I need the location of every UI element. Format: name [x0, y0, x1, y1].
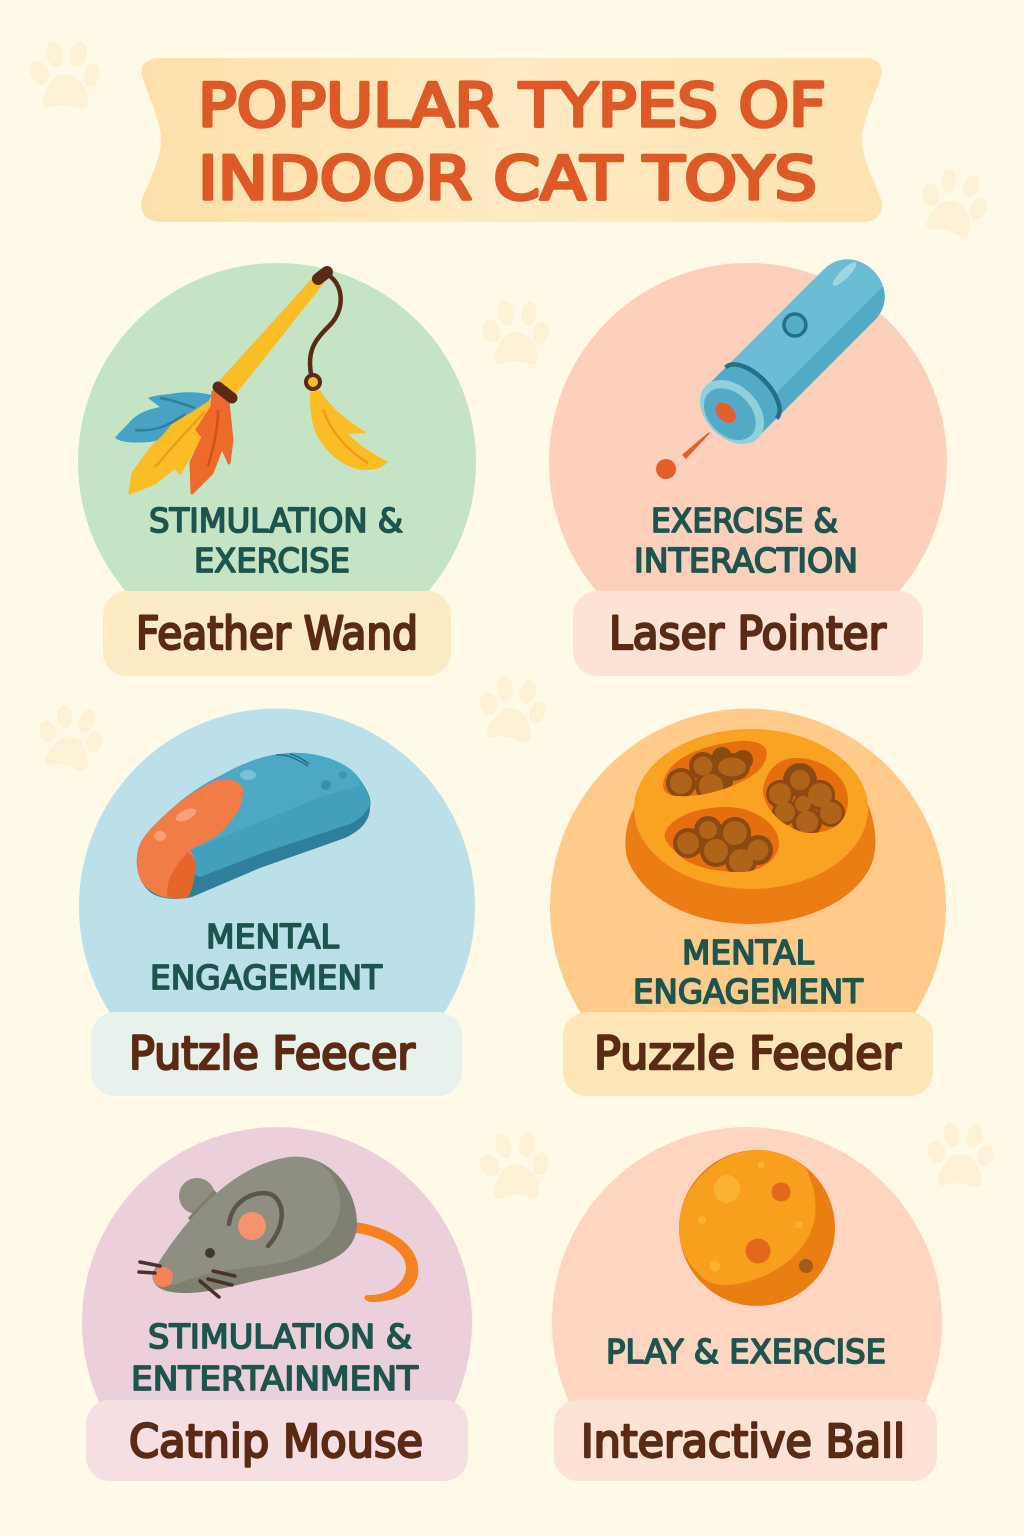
- name pill: [563, 1012, 933, 1096]
- panel: catnip mouse: [82, 1127, 472, 1481]
- background paw prints: [26, 39, 996, 1202]
- title banner: [141, 58, 882, 222]
- icon: puzzle feeder bowl: [625, 729, 875, 924]
- name pill: Laser Pointer: [609, 607, 886, 660]
- category text: MENTAL: [206, 917, 340, 956]
- name pill: [91, 1012, 462, 1096]
- category text: ENTERTAINMENT: [131, 1359, 419, 1398]
- panel: interactive ball: [552, 1127, 942, 1481]
- category text: [633, 933, 864, 1011]
- category text: [150, 917, 383, 997]
- category text: EXERCISE: [194, 541, 350, 580]
- category text: [634, 501, 858, 580]
- category text: ENGAGEMENT: [633, 972, 864, 1011]
- name pill: Puzzle Feeder: [594, 1027, 901, 1080]
- category text: ENGAGEMENT: [150, 958, 383, 997]
- category text: STIMULATION &: [149, 501, 403, 540]
- category text: [131, 1317, 419, 1398]
- category text: INTERACTION: [634, 541, 858, 580]
- icon: feather wand toy: [115, 272, 388, 493]
- category text: MENTAL: [682, 933, 815, 972]
- icon: laser pointer: [656, 259, 885, 479]
- category text: EXERCISE &: [651, 501, 838, 540]
- panel: putzle feecer: [79, 709, 475, 1096]
- name pill: Feather Wand: [136, 607, 418, 660]
- name pill: [103, 591, 451, 676]
- name pill: Catnip Mouse: [129, 1415, 423, 1468]
- icon: blue puzzle toy: [137, 753, 370, 899]
- title: POPULAR TYPES OF: [198, 71, 826, 141]
- icon: catnip mouse: [139, 1157, 418, 1302]
- category text: STIMULATION &: [148, 1317, 412, 1356]
- name pill: [573, 591, 923, 676]
- title: [198, 71, 826, 214]
- category text: [149, 501, 403, 580]
- panel: puzzle feeder: [550, 709, 946, 1096]
- name pill: Interactive Ball: [581, 1415, 905, 1468]
- icon: orange ball: [679, 1150, 835, 1306]
- panel: laser pointer: [549, 241, 947, 676]
- name pill: [554, 1400, 937, 1481]
- category text: PLAY & EXERCISE: [606, 1332, 886, 1371]
- name pill: [86, 1400, 468, 1481]
- title: INDOOR CAT TOYS: [198, 144, 817, 214]
- panel: feather wand: [78, 263, 476, 676]
- name pill: Putzle Feecer: [129, 1027, 415, 1080]
